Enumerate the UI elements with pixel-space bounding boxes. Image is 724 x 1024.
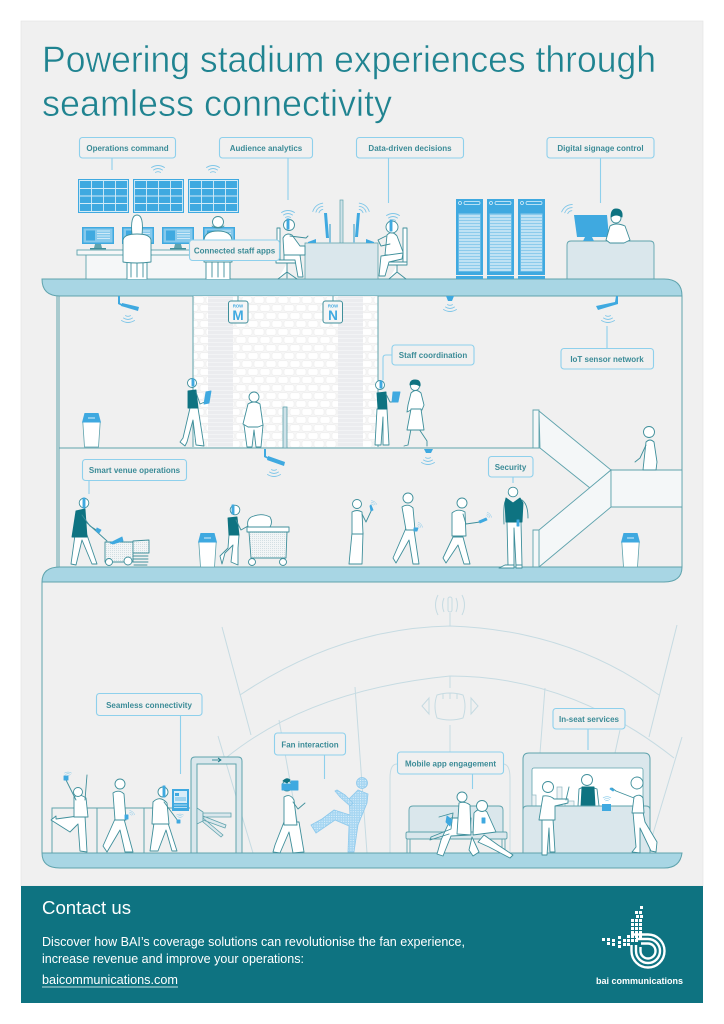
cleaner figure <box>71 498 101 565</box>
server racks <box>456 199 545 279</box>
sign: row N: N <box>328 308 338 323</box>
wifi icons <box>282 202 400 220</box>
sign: row N: ROW <box>328 304 338 308</box>
callout: security: Security <box>495 463 527 472</box>
callout: smart venue operations <box>82 460 186 494</box>
brick wall corridor <box>193 296 378 447</box>
callout: connected staff apps <box>190 240 280 260</box>
title: Powering stadium experiences through <box>42 38 656 80</box>
customer left <box>539 782 569 855</box>
camera: mid floor <box>264 449 285 476</box>
staff member on stairs <box>635 426 657 470</box>
icon: football <box>422 693 478 720</box>
scrubber machine <box>86 522 149 566</box>
callout: audience analytics: Audience analytics <box>230 144 303 153</box>
callout: mobile app engagement: Mobile app engagement <box>405 759 496 768</box>
callout: staff coordination <box>383 345 474 380</box>
shelf items <box>532 787 574 806</box>
operator 2 <box>204 216 232 279</box>
cleaner with scrubber <box>71 498 149 566</box>
woman walking with skirt <box>404 380 427 446</box>
analyst right <box>378 220 407 279</box>
callout: in-seat services <box>553 708 625 750</box>
callout: digital signage control: Digital signage control <box>557 144 644 153</box>
blue monitor <box>574 215 609 241</box>
stadium background line art <box>218 595 682 853</box>
server behind counter <box>578 774 599 806</box>
callout: security <box>488 456 533 483</box>
title <box>42 38 656 124</box>
payment terminal <box>602 797 611 811</box>
title: seamless connectivity <box>42 82 392 124</box>
BAI logo <box>596 906 683 987</box>
wifi near entry fans <box>64 772 184 818</box>
floor slab: fan zone <box>42 853 682 868</box>
in-seat service kiosk <box>523 753 650 853</box>
turnstile arms <box>197 808 231 837</box>
footer body text: increase revenue and improve your operations: <box>42 952 304 966</box>
callout: smart venue operations: Smart venue operations <box>89 466 181 475</box>
camera: right ceiling <box>596 296 618 322</box>
turnstile gate <box>191 757 242 853</box>
wifi icons above screens <box>152 166 220 172</box>
fan in entry queue 2 <box>150 786 180 851</box>
slim monitors <box>308 213 374 243</box>
staff with tablet, upper left <box>180 378 211 446</box>
callout: connected staff apps: Connected staff apps <box>194 246 276 255</box>
video wall screens <box>78 179 239 213</box>
callout: in-seat services: In-seat services <box>559 715 620 724</box>
customer right <box>610 777 657 853</box>
seated man with laptop <box>430 792 471 856</box>
sign: row N <box>323 296 342 323</box>
camera: left ceiling <box>118 296 139 322</box>
desk monitors <box>82 227 235 249</box>
row signs <box>228 296 342 323</box>
footer link: baicommunications.com <box>42 973 178 987</box>
callout: seamless connectivity <box>96 694 202 774</box>
fan in VR headset <box>273 779 305 853</box>
callout: fan interaction <box>274 733 346 779</box>
analyst left <box>276 219 308 279</box>
structural walls and mid floor <box>42 296 682 853</box>
fan with phone 1 <box>349 500 373 564</box>
desk body <box>305 243 378 279</box>
floor slab: roof level <box>42 279 682 296</box>
footer body text <box>42 935 465 966</box>
footer panel <box>21 886 703 1003</box>
security guard <box>499 487 528 568</box>
icon: antenna <box>436 595 464 615</box>
staircase <box>533 410 682 567</box>
callout: staff coordination: Staff coordination <box>399 351 467 360</box>
wifi near fan phones <box>370 500 492 529</box>
sign: row M <box>228 296 248 323</box>
footer heading: Contact us <box>42 898 131 918</box>
footer body text: Discover how BAI’s coverage solutions can revolutionise the fan experience, <box>42 935 465 949</box>
cart with bag <box>247 515 289 566</box>
callout: operations command <box>80 138 176 170</box>
waste bins <box>82 413 640 567</box>
man facing wall <box>243 392 263 447</box>
callout: digital signage control <box>547 138 654 203</box>
logo mark <box>602 906 643 948</box>
floor slab: concourse <box>42 567 682 582</box>
arrow sign <box>212 758 221 762</box>
sensor: mid floor <box>422 449 434 464</box>
service window <box>532 768 643 806</box>
ceiling cameras and sensors <box>118 296 618 476</box>
callout: audience analytics <box>220 138 312 200</box>
sensor: ceiling centre <box>444 296 456 312</box>
sign: row M: ROW <box>233 304 243 308</box>
callout: data-driven decisions: Data-driven decisions <box>368 144 452 153</box>
callout: mobile app engagement <box>398 752 504 789</box>
entry barrier fence <box>52 808 190 853</box>
callout: operations command: Operations command <box>86 144 169 153</box>
callout: IoT sensor network <box>561 326 654 369</box>
staff with tablet, right <box>375 380 400 445</box>
fan walking 2 <box>443 498 487 564</box>
bench <box>406 806 507 853</box>
operator 1 <box>123 215 151 279</box>
callout: seamless connectivity: Seamless connectivity <box>106 701 192 710</box>
callout: IoT sensor network: IoT sensor network <box>570 355 644 364</box>
desk <box>567 241 654 279</box>
panel: infographic background <box>21 21 703 886</box>
operator desk <box>77 250 219 279</box>
callout: fan interaction: Fan interaction <box>281 740 339 749</box>
staff with cart <box>220 505 289 566</box>
seated woman with phone <box>469 800 513 858</box>
fan walking 1 <box>393 493 419 564</box>
hologram figure <box>311 778 368 852</box>
counter <box>523 806 650 853</box>
fan in entry queue 1 <box>103 779 133 852</box>
staff figure <box>220 505 248 565</box>
ticket device <box>172 789 189 811</box>
control room <box>77 166 239 279</box>
person at desk <box>606 209 630 243</box>
sign: row M: M <box>232 308 244 323</box>
callout: data-driven decisions <box>356 138 464 203</box>
central pole <box>340 200 343 244</box>
post <box>283 407 287 448</box>
fan cheering <box>51 775 88 852</box>
digital signage desk <box>561 203 654 279</box>
logo wordmark: bai communications <box>596 976 683 987</box>
wifi icon <box>561 203 575 216</box>
analyst desk <box>276 200 407 279</box>
